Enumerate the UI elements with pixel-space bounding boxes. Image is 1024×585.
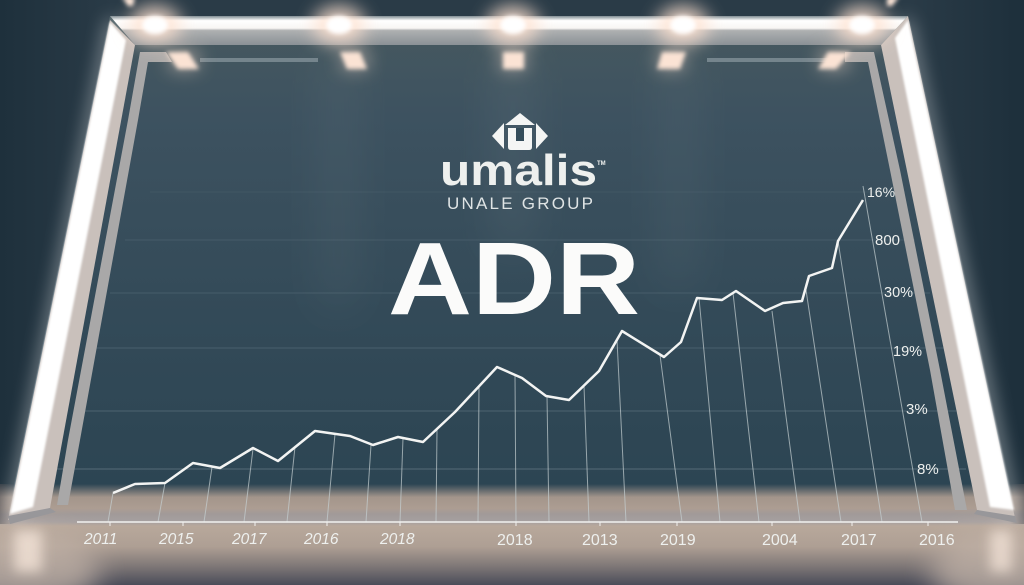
chart grid lines	[55, 192, 966, 469]
ceiling lights	[122, 0, 899, 44]
x axis labels: 2018	[379, 531, 415, 548]
x axis labels: 2019	[660, 532, 696, 549]
y axis labels: 30%	[884, 285, 913, 301]
floor	[0, 484, 1024, 585]
inner frame	[57, 52, 967, 510]
x axis labels: 2018	[497, 532, 533, 549]
y axis labels: 8%	[917, 461, 939, 478]
chart drop lines	[108, 186, 922, 522]
right column	[881, 16, 1017, 523]
x axis labels: 2004	[762, 532, 798, 549]
logo	[440, 113, 606, 213]
y axis labels: 3%	[906, 401, 928, 418]
left column	[8, 20, 135, 524]
x axis labels: 2011	[83, 531, 117, 548]
trademark: TM	[597, 161, 606, 167]
x axis labels: 2016	[303, 531, 339, 548]
x axis labels: 2017	[231, 531, 268, 548]
x axis	[77, 522, 958, 526]
x axis labels: 2015	[158, 531, 194, 548]
line chart trend	[113, 200, 863, 493]
x axis labels: 2013	[582, 532, 618, 549]
x axis labels: 2017	[841, 532, 877, 549]
subtitle: UNALE GROUP	[447, 194, 593, 213]
x axis labels: 2016	[919, 532, 955, 549]
y axis labels: 16%	[867, 184, 895, 200]
y axis labels	[867, 184, 939, 478]
wordmark: umalis	[440, 146, 597, 195]
top beam	[110, 16, 908, 45]
x axis labels	[83, 531, 955, 549]
y axis labels: 800	[875, 232, 900, 249]
title: ADR	[388, 221, 640, 336]
lower reflected lights	[166, 50, 851, 70]
y axis labels: 19%	[893, 344, 922, 360]
icon: diamond U mark	[492, 113, 548, 150]
